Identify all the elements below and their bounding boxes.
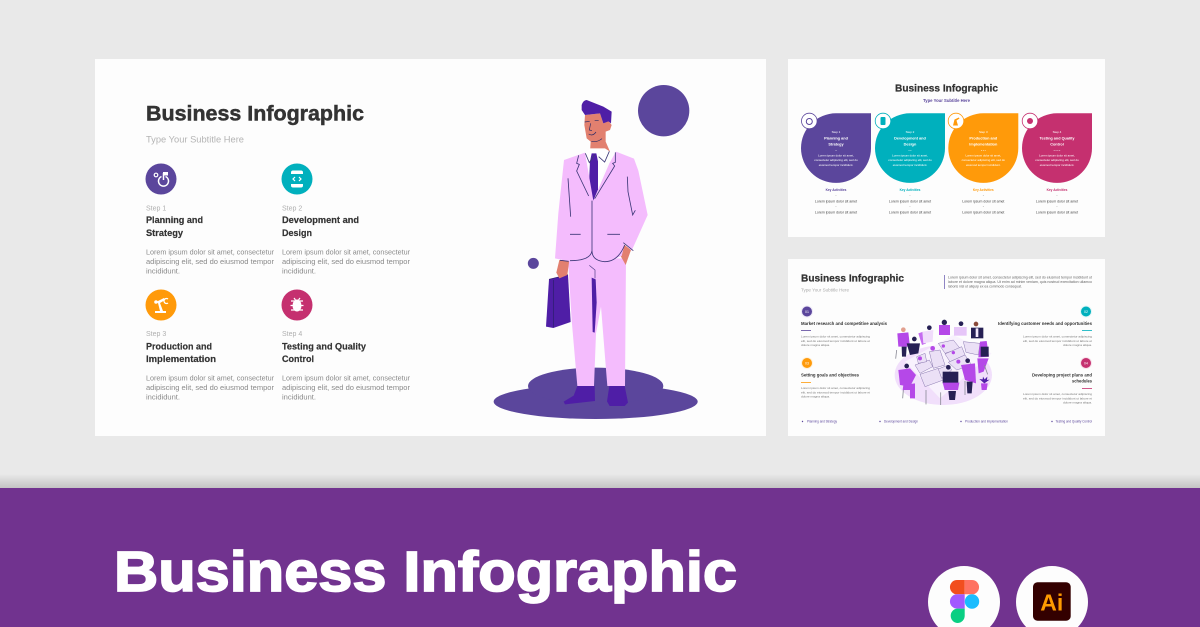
footer legend: Testing and Quality Control	[1056, 420, 1092, 424]
footer legend: Planning and Strategy	[807, 420, 837, 424]
slide 3 intro text: laboris nisi ut aliquip ex ea commodo consequat.	[948, 284, 1022, 288]
step 2 block: Lorem ipsum dolor sit amet, consectetur	[282, 248, 410, 256]
card: step 4: consectetur adipiscing elit, sed do	[1035, 158, 1079, 162]
card: step 3: Production and	[969, 136, 998, 140]
item 04: elit, sed do eiusmod tempor incididunt ut labore et	[1023, 396, 1092, 400]
slide 3 heading: Business Infographic	[801, 272, 904, 284]
step 1 block: adipiscing elit, sed do eiusmod tempor	[146, 257, 274, 266]
item 03: dolore magna aliqua.	[801, 394, 830, 398]
step 3 block: Production and	[146, 342, 212, 352]
item 02: Identifying customer needs and opportunities	[998, 321, 1093, 326]
item 02	[998, 306, 1093, 347]
card: step 4: eiusmod tempor incididunt.	[1040, 163, 1074, 167]
card: step 1: -	[835, 194, 837, 198]
card: step 4: Key Activities	[1047, 188, 1068, 192]
item 03: elit, sed do eiusmod tempor incididunt ut labore et	[801, 390, 870, 394]
card: step 2	[875, 113, 945, 214]
card: step 3: eiusmod tempor incididunt.	[966, 163, 1001, 167]
item 02: 02	[1084, 310, 1088, 314]
card: step 3: -	[983, 194, 985, 198]
card: step 4: Step 4	[1053, 130, 1062, 134]
card: step 2: Lorem ipsum dolor sit amet,	[892, 154, 928, 158]
card: step 4: Lorem ipsum dolor sit amet,	[1039, 154, 1075, 158]
jacket	[555, 152, 648, 262]
step 1 block: incididunt.	[146, 266, 180, 276]
card: step 3	[948, 113, 1018, 214]
card: step 4: -	[1056, 204, 1058, 208]
card: step 1: Lorem ipsum dolor sit amet	[815, 199, 857, 203]
step 4 block: Lorem ipsum dolor sit amet, consectetur	[282, 374, 410, 382]
step 4 block: incididunt.	[282, 392, 316, 402]
card: step 4: Lorem ipsum dolor sit amet	[1036, 210, 1078, 214]
slide 3 intro text: Lorem ipsum dolor sit amet, consectetur adipiscing elit, sed do eiusmod tempor incididunt ut	[948, 276, 1092, 280]
floor ellipse	[895, 345, 992, 405]
card: step 1	[801, 113, 871, 214]
step 1 block	[146, 164, 274, 276]
item 01	[801, 306, 888, 347]
illustration: team around table	[895, 320, 992, 405]
main subtitle: Type Your Subtitle Here	[146, 134, 244, 146]
card: step 3: Lorem ipsum dolor sit amet	[962, 210, 1004, 214]
step 2 block: Development and	[282, 215, 359, 226]
item 01: Market research and competitive analysis	[801, 321, 888, 326]
card: step 2: eiusmod tempor incididunt.	[893, 163, 927, 167]
facial details	[585, 121, 602, 142]
slide 2 subtitle: Type Your Subtitle Here	[923, 98, 970, 103]
card: step 3: Implementation	[969, 142, 998, 146]
item 03: Lorem ipsum dolor sit amet, consectetur adipiscing	[801, 386, 870, 390]
illustration: businessman	[494, 85, 698, 419]
step 4 block	[282, 290, 410, 402]
briefcase	[546, 270, 571, 328]
item 04: Developing project plans and	[1032, 372, 1092, 378]
icon: testing bug	[282, 290, 312, 320]
card: step 1: -	[835, 204, 837, 208]
card: step 2: consectetur adipiscing elit, sed do	[888, 158, 932, 162]
card: step 1: Strategy	[828, 142, 844, 146]
icon: Adobe Illustrator logo: Ai	[1040, 590, 1063, 616]
card: step 2: • •	[909, 148, 911, 152]
card: step 2: Development and	[894, 136, 926, 140]
icon: development	[282, 164, 312, 194]
step 2 block: adipiscing elit, sed do eiusmod tempor	[282, 257, 410, 266]
card: step 3: Lorem ipsum dolor sit amet,	[965, 154, 1001, 158]
panel: four-step card slide	[788, 59, 1105, 237]
step 3 block: Lorem ipsum dolor sit amet, consectetur	[146, 374, 274, 382]
icon: Adobe Illustrator logo	[1016, 566, 1088, 627]
footer legend: Development and Design	[884, 420, 918, 424]
step 4 block: Step 4	[282, 331, 302, 338]
item 03	[801, 357, 870, 398]
panel: team meeting slide	[788, 259, 1105, 436]
step 4 block: Testing and Quality	[282, 342, 367, 352]
item 04	[1023, 357, 1093, 404]
shirt and tie	[585, 148, 610, 202]
item 02: Lorem ipsum dolor sit amet, consectetur adipiscing	[1023, 334, 1092, 338]
neck and face	[584, 113, 612, 152]
hair	[582, 100, 612, 123]
item 01: Lorem ipsum dolor sit amet, consectetur adipiscing	[801, 334, 870, 338]
step 1 block: Step 1	[146, 206, 166, 212]
card: step 2: Key Activities	[900, 188, 921, 192]
card: step 4: -	[1056, 194, 1058, 198]
item 01: elit, sed do eiusmod tempor incididunt ut labore et	[801, 339, 870, 343]
item 01: 01	[805, 310, 809, 314]
banner title: Business Infographic	[114, 540, 737, 603]
card: step 1: Lorem ipsum dolor sit amet	[815, 210, 857, 214]
ground shadow	[494, 368, 698, 419]
card: step 3: • • •	[981, 148, 986, 152]
main heading: Business Infographic	[146, 102, 364, 126]
step 3 block: Step 3	[146, 331, 166, 338]
item 04: 04	[1084, 361, 1088, 365]
card: step 1: consectetur adipiscing elit, sed do	[814, 158, 858, 162]
decorative large circle	[638, 85, 689, 136]
table and chair legs	[896, 350, 988, 405]
footer legend	[802, 420, 1092, 424]
card: step 3: Lorem ipsum dolor sit amet	[962, 199, 1004, 203]
card: step 3: -	[983, 204, 985, 208]
table papers	[915, 340, 980, 387]
card: step 4: Control	[1050, 142, 1064, 146]
card: step 1: •	[835, 148, 837, 152]
item 04: dolore magna aliqua.	[1063, 400, 1092, 404]
slide 2 heading: Business Infographic	[895, 82, 998, 94]
step 3 block: Implementation	[146, 354, 216, 365]
shoes	[564, 386, 628, 406]
table	[905, 335, 992, 398]
card: step 1: Step 1	[832, 130, 841, 134]
item 02: elit, sed do eiusmod tempor incididunt ut labore et	[1023, 339, 1092, 343]
item 04: schedules	[1072, 378, 1093, 384]
step 3 block	[146, 290, 274, 402]
decorative small circle	[528, 258, 539, 269]
trousers	[568, 258, 626, 386]
card: step 2: Lorem ipsum dolor sit amet	[889, 199, 931, 203]
paper details	[918, 344, 960, 364]
step 1 block: Lorem ipsum dolor sit amet, consectetur	[146, 248, 274, 256]
hands	[556, 243, 631, 278]
card: step 4: • • • •	[1054, 148, 1060, 152]
card: step 2: -	[909, 194, 911, 198]
card: step 3: Key Activities	[973, 188, 994, 192]
step 2 block: incididunt.	[282, 266, 316, 276]
item 03: Setting goals and objectives	[801, 372, 860, 378]
plant	[979, 377, 990, 390]
step 4 block: Control	[282, 354, 314, 365]
step 2 block: Step 2	[282, 206, 302, 212]
jacket seams	[560, 151, 635, 262]
item 03: 03	[805, 361, 809, 365]
card: step 4: Lorem ipsum dolor sit amet	[1036, 199, 1078, 203]
slide 3 subtitle: Type Your Subtitle Here	[801, 288, 850, 292]
card: step 3: Step 3	[979, 130, 988, 134]
slide 3 intro text: labore et dolore magna aliqua. Ut enim ad minim veniam, quis nostrud exercitation ullamco	[948, 280, 1092, 284]
icon: Figma logo	[928, 566, 1000, 627]
step 1 block: Planning and	[146, 215, 203, 226]
step 2 block	[282, 164, 410, 276]
icon: planning	[146, 164, 176, 194]
card: step 1: eiusmod tempor incididunt.	[819, 163, 853, 167]
seated people	[897, 320, 989, 400]
card: step 4	[1022, 113, 1092, 214]
card: step 2: Lorem ipsum dolor sit amet	[889, 210, 931, 214]
panel: main slide	[95, 59, 766, 436]
card: step 1: Planning and	[824, 136, 849, 140]
step 4 block: adipiscing elit, sed do eiusmod tempor	[282, 383, 410, 392]
bottom banner	[0, 488, 1200, 627]
step 2 block: Design	[282, 228, 312, 239]
icon: production	[146, 290, 176, 320]
item 01: dolore magna aliqua.	[801, 343, 830, 347]
card: step 1: Lorem ipsum dolor sit amet,	[818, 154, 854, 158]
step 1 block: Strategy	[146, 228, 184, 239]
card: step 4: Testing and Quality	[1040, 136, 1075, 140]
card: step 1: Key Activities	[826, 188, 847, 192]
item 02: dolore magna aliqua.	[1063, 343, 1092, 347]
card: step 3: consectetur adipiscing elit, sed do	[962, 158, 1005, 162]
card: step 2: Design	[904, 142, 917, 146]
item 04: Lorem ipsum dolor sit amet, consectetur adipiscing	[1023, 392, 1092, 396]
card: step 2: Step 2	[906, 130, 915, 134]
step 3 block: incididunt.	[146, 392, 180, 402]
slide 3 intro text	[944, 275, 1092, 289]
card: step 2: -	[909, 204, 911, 208]
footer legend: Production and Implementation	[965, 420, 1008, 424]
step 3 block: adipiscing elit, sed do eiusmod tempor	[146, 383, 274, 392]
